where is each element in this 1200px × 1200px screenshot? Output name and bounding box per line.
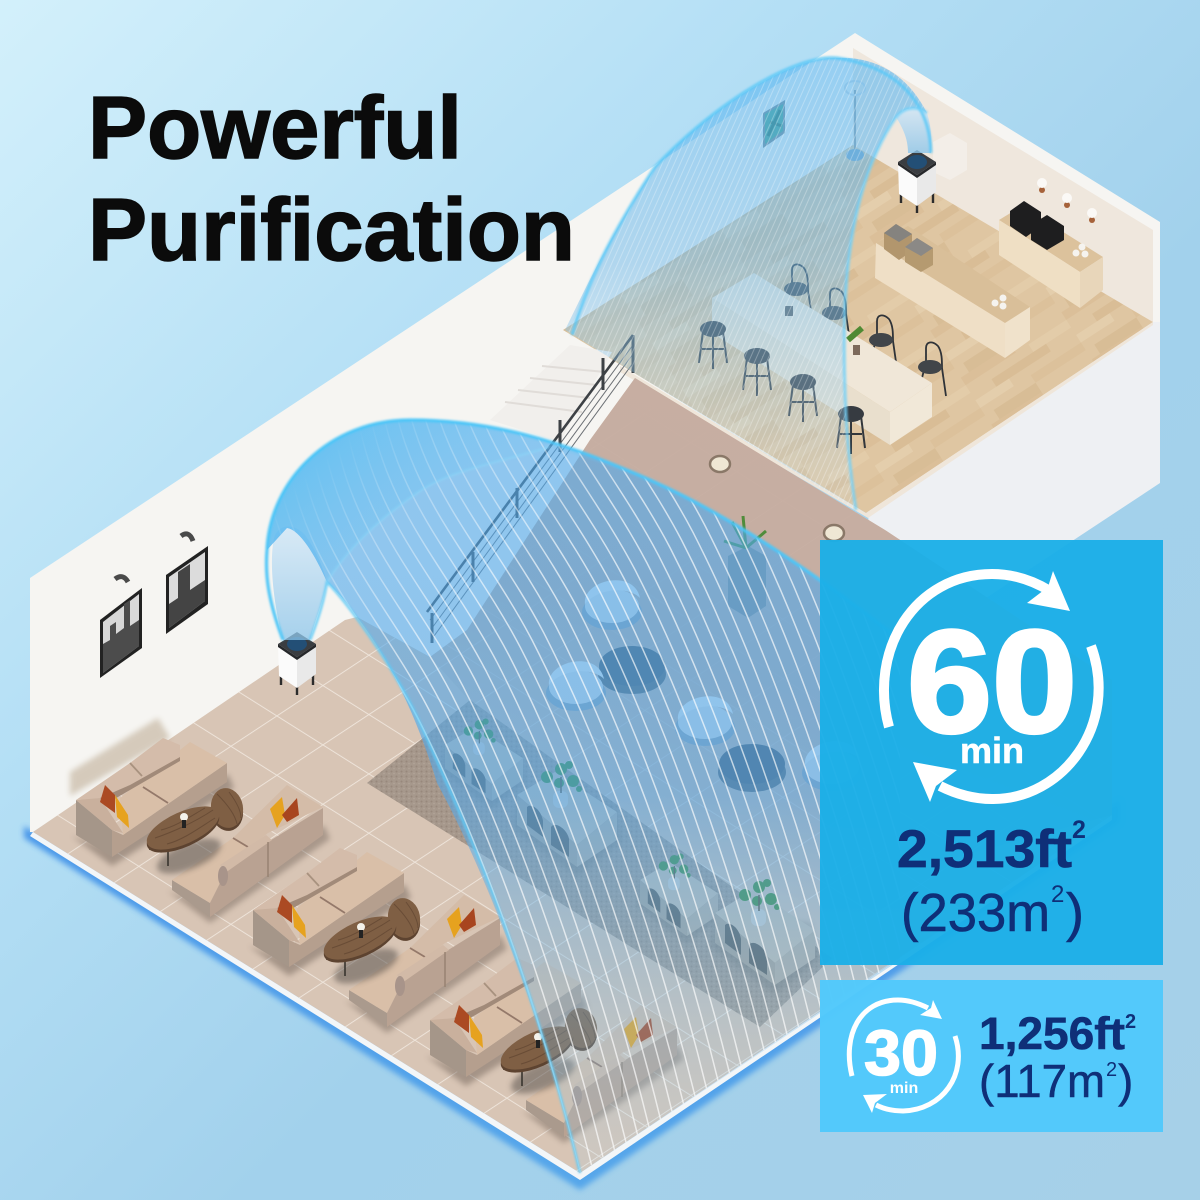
tall planter bbox=[724, 516, 766, 618]
air stripes bbox=[278, 422, 891, 1172]
icon: 60 min circular arrows bbox=[884, 571, 1099, 802]
upper inner arch bbox=[896, 108, 931, 153]
area in square feet: 1,256ft bbox=[979, 1008, 1125, 1059]
floor front ledge bbox=[30, 815, 1112, 1180]
ceiling lights bbox=[710, 456, 844, 541]
bar stools bbox=[699, 321, 865, 454]
lower veil bbox=[267, 420, 892, 1172]
coffee tables bbox=[141, 786, 600, 1101]
upper wood floor bbox=[563, 145, 1153, 513]
upper purifier bbox=[898, 150, 936, 213]
30: 30 bbox=[864, 1017, 938, 1089]
panel: 60 min coverage bbox=[820, 540, 1163, 965]
exterior wall under upper floor bbox=[868, 322, 1160, 668]
lower purifier bbox=[278, 632, 316, 695]
dining counter bbox=[712, 273, 932, 445]
feet superscript: 2 bbox=[1125, 1011, 1136, 1033]
lower room pink tone bbox=[430, 378, 1112, 900]
area in square metres: (117m bbox=[979, 1055, 1105, 1107]
floor lamp bbox=[845, 81, 865, 161]
wall art: city prints bbox=[100, 534, 208, 678]
title: Powerful bbox=[88, 78, 462, 177]
ghost box on wall bbox=[933, 133, 967, 180]
upper floor edge bbox=[620, 322, 1153, 518]
rug bbox=[367, 700, 832, 1027]
lower room floor bbox=[33, 378, 1112, 1173]
lounge furniture bbox=[546, 580, 862, 792]
kitchen wall counter bbox=[999, 178, 1103, 308]
icon: 30 min circular arrows bbox=[849, 1000, 958, 1113]
stair rail bbox=[427, 335, 633, 643]
title: Purification bbox=[88, 180, 575, 279]
upper veil inner edge bbox=[844, 108, 927, 510]
upper veil edge bbox=[572, 58, 931, 335]
wall art: upper green print bbox=[763, 100, 785, 148]
min: min bbox=[960, 730, 1024, 771]
lower veil fold bbox=[327, 447, 550, 582]
building shell bbox=[30, 33, 1160, 832]
metres superscript: 2 bbox=[1106, 1059, 1117, 1081]
60: 60 bbox=[907, 600, 1077, 763]
upper room side wall bbox=[853, 48, 1153, 322]
stairs and soffit bbox=[427, 335, 633, 643]
sofa group bbox=[72, 738, 684, 1143]
closing bracket: ) bbox=[1066, 883, 1084, 943]
plant tables bbox=[442, 718, 819, 995]
lower veil edge bbox=[266, 420, 900, 640]
panel: 30 min coverage bbox=[820, 980, 1163, 1132]
kitchen island bbox=[875, 224, 1030, 358]
long back wall bbox=[30, 33, 1160, 832]
upper veil bbox=[565, 58, 927, 508]
air flow: upper bbox=[565, 54, 934, 511]
lower veil inner edge bbox=[310, 582, 580, 1173]
closing bracket: ) bbox=[1118, 1055, 1133, 1107]
floor glow shadow bbox=[24, 800, 1120, 1190]
title bbox=[88, 78, 575, 279]
min: min bbox=[890, 1080, 918, 1097]
area in square feet: 2,513ft bbox=[897, 820, 1072, 879]
metres superscript: 2 bbox=[1051, 881, 1064, 908]
lower inner arch bbox=[272, 526, 327, 640]
area in square metres: (233m bbox=[901, 883, 1050, 943]
feet superscript: 2 bbox=[1072, 816, 1086, 844]
back chairs bbox=[784, 264, 946, 396]
air flow: lower bbox=[263, 416, 892, 1174]
sofa shadow on wall bbox=[70, 718, 170, 796]
